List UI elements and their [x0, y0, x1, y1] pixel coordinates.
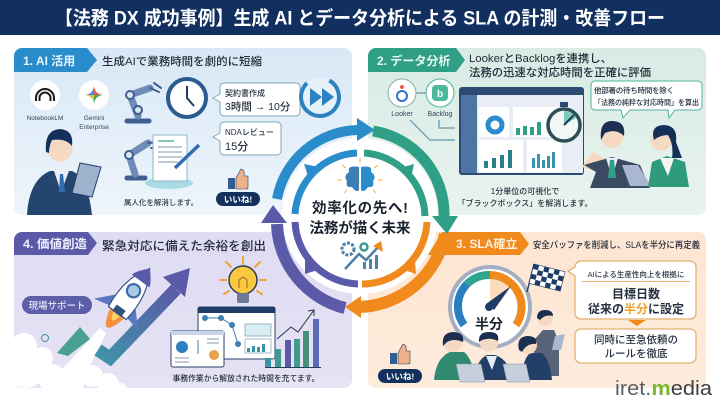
center text: [310, 199, 411, 237]
step banner 2: [368, 48, 465, 72]
icon: lightbulb: [220, 257, 266, 303]
outer arrow: green: [373, 131, 458, 234]
callout: 目標日数: [568, 261, 696, 319]
caption 2: 1分単位の可視化で: [491, 186, 559, 196]
icon: Gemini Enterprise: Gemini: [84, 115, 104, 122]
icon: brain: [337, 158, 383, 193]
pill: 現場サポート: 現場サポート: [28, 300, 86, 312]
icon: gears and growth chart: [342, 241, 383, 269]
badge: いいね 3: [378, 369, 422, 383]
step banner 2: 2. データ分析: [377, 53, 450, 68]
callout: NDAレビュー: [213, 122, 281, 155]
icon: NotebookLM: NotebookLM: [27, 115, 63, 122]
step banner 1: [14, 48, 97, 72]
small bubble: [42, 334, 48, 342]
step banner 3: 3. SLA確立: [456, 236, 517, 251]
title banner: 【法務 DX 成功事例】生成 AI とデータ分析による SLA の計測・改善フロー: [55, 6, 665, 30]
caption 1: 属人化を解消します。: [124, 197, 198, 207]
icon: Backlog: Backlog: [428, 111, 453, 118]
heading 2: 法務の迅速な対応時間を正確に評価: [469, 65, 651, 79]
callout: 目標日数: 目標日数: [612, 286, 660, 301]
inner arrow: purple: [295, 222, 358, 284]
icon: Gemini Enterprise: [79, 80, 109, 131]
gauge: 半分: [475, 316, 503, 332]
connector lines: [410, 93, 455, 140]
dashboard screen: [459, 87, 584, 175]
icon: fast forward: [294, 71, 346, 123]
bar chart: [265, 310, 321, 368]
callout: 契約書作成: 契約書作成: [225, 88, 265, 98]
callout: 目標日数: AIによる生産性向上を根拠に: [588, 269, 684, 279]
inner arrow: green: [364, 153, 425, 216]
callout: 契約書作成: 3時間 → 10分: [225, 100, 291, 113]
callout: NDAレビュー: 15分: [225, 140, 248, 153]
person: woman: [648, 125, 689, 187]
step banner 4: 4. 価値創造: [23, 236, 87, 251]
clouds: [14, 328, 126, 388]
inner arrow: orange: [362, 222, 427, 284]
outer arrow: blue: [277, 118, 375, 199]
icon: thumbs up: [228, 169, 248, 189]
panel: 3. SLA確立: [368, 232, 706, 388]
heading 3: 安全バッファを削減し、SLAを半分に再定義: [533, 239, 700, 250]
callout: 純粋な対応時間: [591, 81, 702, 118]
panel: 2. データ分析: [368, 48, 706, 215]
heading 2: LookerとBacklogを連携し、: [469, 51, 612, 65]
pill: 現場サポート: [22, 296, 92, 314]
person: man with tablet: [27, 129, 101, 215]
callout: 純粋な対応時間: 「法務の純粋な対応時間」を算出: [594, 97, 699, 107]
outer arrow: orange: [345, 234, 445, 318]
person: man presenting: [582, 121, 651, 188]
badge: いいね 3: いいね!: [386, 372, 414, 382]
icon: robot arm top: [126, 83, 161, 121]
caption 2: 「ブラックボックス」を解消します。: [458, 198, 592, 208]
icon: contract document: [145, 135, 199, 189]
icon: Backlog: b: [437, 89, 443, 100]
panel: 4. 価値創造: [8, 232, 352, 397]
center cycle diagram: [261, 118, 458, 318]
callout: 目標日数: 従来の半分に設定: [588, 301, 684, 316]
icon: clock: [168, 79, 206, 117]
icon: thumbs up 3: [390, 344, 410, 364]
title banner: [0, 0, 720, 35]
step banner 1: 1. AI 活用: [23, 53, 75, 68]
inner arrow: blue: [295, 153, 357, 214]
heading 2: [469, 51, 651, 79]
step banner 4: [14, 232, 97, 255]
icon: checkered flag: [527, 264, 565, 292]
icon: Looker: Looker: [391, 111, 413, 118]
step banner 3: [428, 232, 529, 255]
people: team with laptops: [434, 310, 565, 382]
icon: robot arm bottom: [125, 142, 159, 178]
outer arrow: purple: [261, 205, 345, 308]
icon: NotebookLM: [27, 80, 63, 122]
callout: 契約書作成: [213, 83, 300, 116]
icon: Looker: [388, 79, 416, 118]
callout: ルールを徹底: [575, 329, 696, 363]
heading 1: 生成AIで業務時間を劇的に短縮: [102, 54, 262, 68]
callout: ルールを徹底: ルールを徹底: [604, 347, 668, 360]
heading 4: 緊急対応に備えた余裕を創出: [102, 238, 266, 253]
icon: Backlog: [426, 79, 454, 118]
center text: 効率化の先へ!: [312, 199, 408, 217]
panel: 1. AI活用: [14, 48, 352, 215]
chart window back: [198, 307, 275, 359]
badge: いいね: [216, 192, 260, 206]
caption 2: [458, 186, 592, 208]
caption 4: 事務作業から解放された時間を充てます。: [173, 373, 319, 383]
gauge: [450, 267, 530, 347]
center text: 法務が描く未来: [310, 219, 411, 237]
arrow down: [628, 320, 646, 326]
chart window front: [171, 331, 224, 367]
logo: iret.media: iret.media: [615, 378, 713, 400]
badge: いいね: いいね!: [224, 194, 252, 204]
rising arrow: [57, 268, 190, 358]
callout: 純粋な対応時間: 他部署の待ち時間を除く: [594, 85, 674, 95]
callout: NDAレビュー: NDAレビュー: [225, 127, 274, 137]
icon: Gemini Enterprise: Enterprise: [79, 124, 109, 131]
callout: ルールを徹底: 同時に至急依頼の: [594, 333, 678, 346]
icon: stopwatch: [548, 102, 580, 141]
icon: rocket: [85, 252, 172, 343]
